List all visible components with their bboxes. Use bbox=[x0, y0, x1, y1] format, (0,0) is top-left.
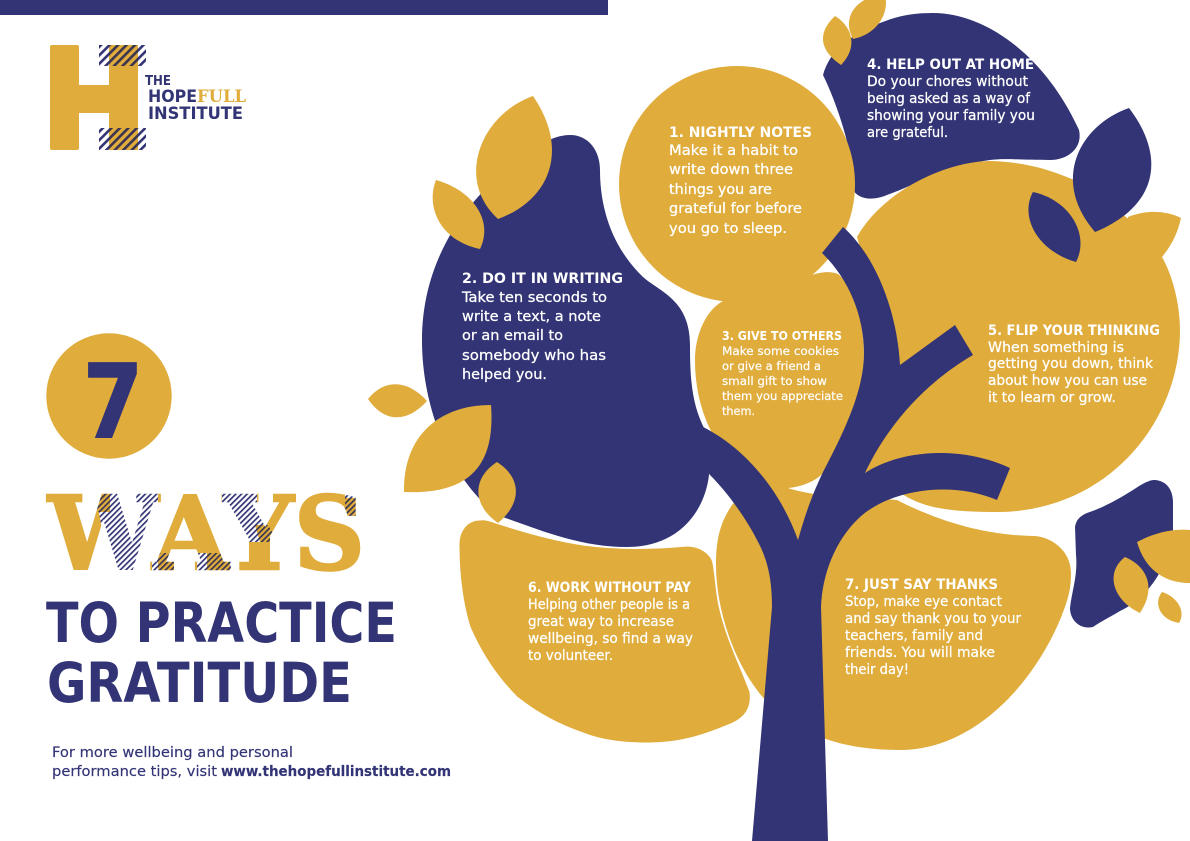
leaf: top gold lower bbox=[823, 16, 851, 65]
panel: blob 3 gold bbox=[695, 272, 864, 545]
tree trunk and branches bbox=[690, 227, 1010, 841]
leaf: left horizontal bbox=[368, 384, 427, 417]
text: 6 work without pay: Helping other people is a bbox=[528, 597, 690, 613]
text: 3 give to others: Make some cookies bbox=[722, 344, 839, 358]
leaf: right navy small bbox=[1028, 192, 1080, 262]
text: 7 just say thanks: teachers, family and bbox=[845, 628, 983, 644]
footer text: performance tips, visit bbox=[52, 764, 218, 780]
text: 2 do it in writing: or an email to bbox=[462, 328, 563, 344]
text: 2 do it in writing: Take ten seconds to bbox=[461, 290, 607, 306]
top bar bbox=[0, 0, 608, 15]
text: 2 do it in writing: helped you. bbox=[462, 367, 547, 383]
text: 5 flip your thinking: it to learn or grow. bbox=[988, 390, 1116, 406]
text: 4 help out at home: are grateful. bbox=[867, 125, 948, 141]
panel: blob 5 gold bbox=[857, 161, 1180, 512]
logo wordmark: FULL bbox=[197, 87, 246, 106]
text: 5 flip your thinking: When something is bbox=[988, 340, 1124, 356]
leaf: top gold upper bbox=[849, 0, 886, 39]
leaf: upper left large bbox=[476, 96, 552, 219]
leaf: right navy large bbox=[1073, 108, 1151, 232]
panel: blob 2 navy bbox=[422, 135, 709, 547]
text: 1 nightly notes: write down three bbox=[669, 162, 793, 178]
text: 4 help out at home bbox=[867, 57, 1035, 141]
leaf: right gold behind bbox=[1124, 212, 1181, 257]
logo H mark bbox=[50, 45, 146, 150]
text: 2 do it in writing: somebody who has bbox=[462, 348, 606, 364]
logo wordmark bbox=[145, 74, 246, 123]
text: 5 flip your thinking bbox=[988, 323, 1160, 406]
panel: blob small navy lower right bbox=[1070, 480, 1173, 628]
leaf: lower right middle bbox=[1114, 557, 1148, 613]
text: 1 nightly notes: Make it a habit to bbox=[669, 143, 798, 159]
text: 6 work without pay: wellbeing, so find a way bbox=[528, 631, 693, 647]
text: 4 help out at home: Do your chores without bbox=[867, 74, 1029, 90]
text: 6 work without pay: to volunteer. bbox=[528, 648, 613, 664]
text: 1 nightly notes bbox=[669, 125, 812, 237]
heading: to practice gratitude bbox=[46, 591, 397, 715]
text: 2 do it in writing: write a text, a note bbox=[462, 309, 601, 325]
text: 3 give to others: or give a friend a bbox=[722, 359, 821, 373]
text: 2 do it in writing bbox=[461, 271, 623, 383]
footer text: For more wellbeing and personal bbox=[52, 745, 293, 761]
panel: blob 4 navy bbox=[823, 13, 1080, 199]
leaf: left large bbox=[404, 405, 491, 492]
logo wordmark: INSTITUTE bbox=[148, 104, 243, 123]
text: 4 help out at home: showing your family you bbox=[867, 108, 1035, 124]
logo bbox=[50, 45, 246, 150]
footer text bbox=[52, 745, 451, 780]
text: 6 work without pay bbox=[528, 580, 693, 664]
text: 5 flip your thinking: about how you can use bbox=[988, 373, 1147, 389]
text: 3 give to others bbox=[722, 329, 843, 418]
text: 4 help out at home: 4. HELP OUT AT HOME bbox=[867, 57, 1034, 73]
text: 4 help out at home: being asked as a way of bbox=[867, 91, 1031, 107]
footer text: www.thehopefullinstitute.com bbox=[221, 764, 451, 780]
leaf: lower left small bbox=[478, 462, 516, 523]
text: 7 just say thanks: Stop, make eye contact bbox=[845, 594, 1002, 610]
text: 1 nightly notes: things you are bbox=[669, 182, 772, 198]
text: 7 just say thanks bbox=[845, 577, 1021, 678]
panel: blob 1 gold circle bbox=[619, 66, 855, 302]
badge: number 7 bbox=[46, 333, 172, 462]
text: 7 just say thanks: and say thank you to your bbox=[845, 611, 1021, 627]
text: 2 do it in writing: 2. DO IT IN WRITING bbox=[462, 271, 623, 287]
text: 3 give to others: 3. GIVE TO OTHERS bbox=[722, 329, 842, 343]
heading: WAYS: WAYS bbox=[47, 474, 365, 593]
logo wordmark: THE bbox=[145, 74, 171, 89]
text: 7 just say thanks: friends. You will make bbox=[845, 645, 995, 661]
text: 3 give to others: small gift to show bbox=[722, 374, 827, 388]
leaf: upper left small bbox=[433, 180, 484, 249]
heading: to practice gratitude: GRATITUDE bbox=[47, 651, 352, 715]
text: 5 flip your thinking: getting you down, think bbox=[988, 356, 1154, 372]
heading: to practice gratitude: TO PRACTICE bbox=[46, 591, 397, 655]
text: 1 nightly notes: you go to sleep. bbox=[669, 221, 787, 237]
text: 6 work without pay: 6. WORK WITHOUT PAY bbox=[528, 580, 691, 596]
text: 1 nightly notes: 1. NIGHTLY NOTES bbox=[669, 125, 812, 141]
leaf: lower right tiny bbox=[1158, 592, 1182, 623]
text: 3 give to others: them you appreciate bbox=[722, 389, 843, 403]
panel: blob 6 gold bbox=[459, 520, 750, 743]
logo wordmark: HOPE bbox=[148, 87, 197, 106]
text: 7 just say thanks: their day! bbox=[845, 662, 909, 678]
badge: number 7: 7 bbox=[83, 343, 143, 462]
leaf: lower right edge bbox=[1137, 530, 1190, 583]
text: 6 work without pay: great way to increase bbox=[528, 614, 674, 630]
text: 3 give to others: them. bbox=[722, 404, 755, 418]
panel: blob 7 gold bbox=[716, 488, 1071, 750]
text: 1 nightly notes: grateful for before bbox=[669, 201, 802, 217]
text: 5 flip your thinking: 5. FLIP YOUR THINKING bbox=[988, 323, 1160, 339]
text: 7 just say thanks: 7. JUST SAY THANKS bbox=[845, 577, 998, 593]
white notch between canopy shapes bbox=[788, 473, 823, 494]
